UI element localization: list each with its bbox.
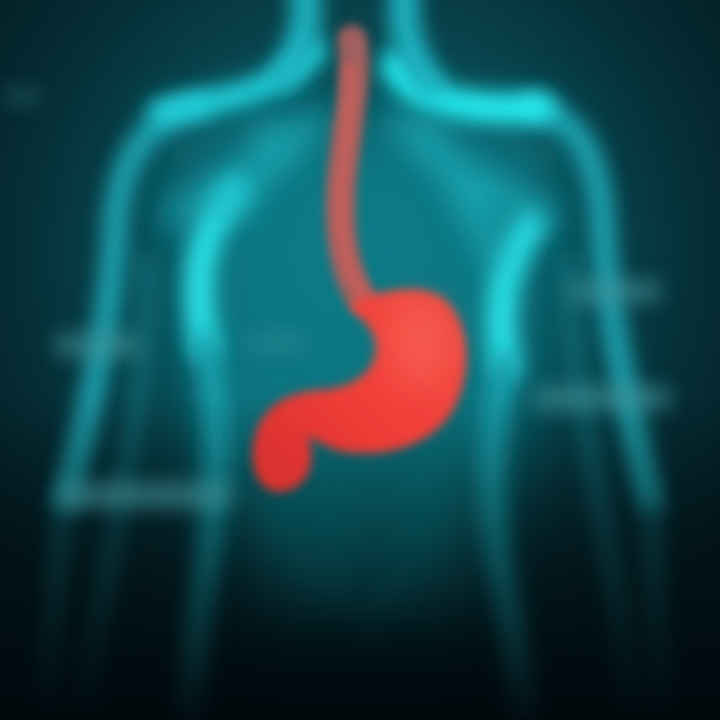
label smudge: right lower [535, 386, 670, 410]
label smudge: right upper [570, 280, 660, 302]
label smudge: lower left [60, 482, 230, 508]
chest lines [175, 120, 545, 260]
faint labels [3, 88, 670, 508]
body glow [170, 120, 560, 620]
stomach highlight [390, 300, 450, 390]
outer arms [65, 105, 650, 500]
neck [285, 0, 430, 85]
clavicle highlights [160, 50, 315, 112]
esophagus [340, 40, 365, 300]
lower arms [48, 260, 660, 710]
stomach [253, 289, 466, 492]
torso sides bright [199, 190, 530, 365]
lower abdomen [289, 480, 423, 610]
label smudge: left middle [55, 334, 140, 356]
label smudge: centre [245, 334, 305, 352]
label smudge: top left [3, 88, 41, 104]
torso lower sides [190, 345, 525, 720]
